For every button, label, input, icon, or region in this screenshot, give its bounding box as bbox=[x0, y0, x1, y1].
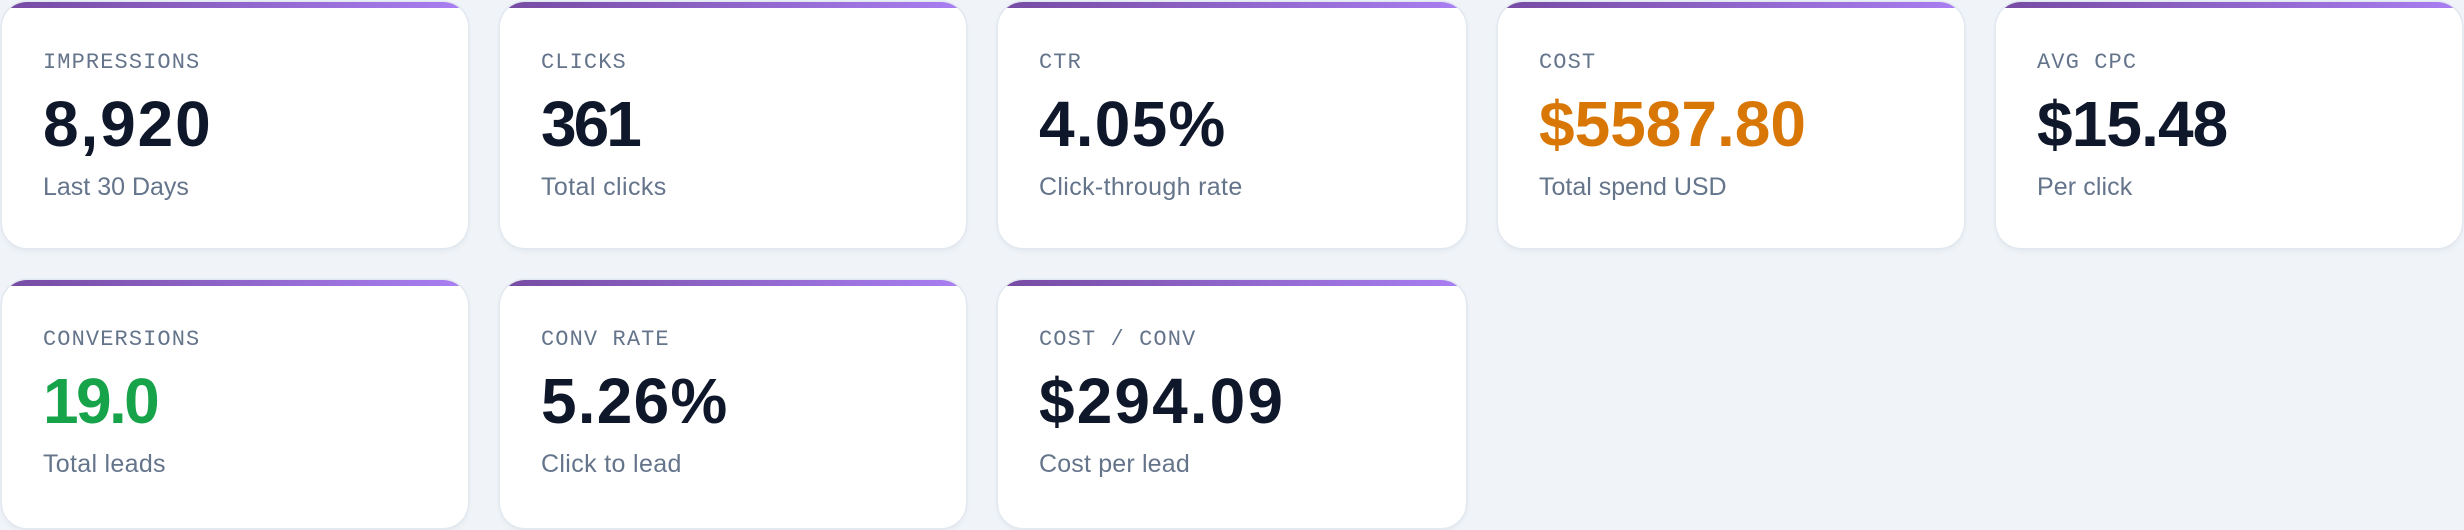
value: 361 bbox=[541, 88, 639, 160]
caption: Cost per lead bbox=[1039, 450, 1190, 478]
value: $294.09 bbox=[1039, 365, 1285, 437]
card: cost per conversion bbox=[998, 280, 1466, 528]
accent bar bbox=[2, 2, 468, 8]
caption: Per click bbox=[2037, 173, 2132, 201]
caption: Click to lead bbox=[541, 450, 682, 478]
accent bar bbox=[500, 280, 966, 286]
value: 5.26% bbox=[541, 365, 728, 437]
label: AVG CPC bbox=[2037, 50, 2137, 75]
card: avg cpc bbox=[1996, 2, 2462, 248]
accent bar bbox=[998, 2, 1466, 8]
caption: Click-through rate bbox=[1039, 173, 1243, 201]
card: conversions bbox=[2, 280, 468, 528]
card: cost bbox=[1498, 2, 1964, 248]
accent bar bbox=[1498, 2, 1964, 8]
accent bar bbox=[998, 280, 1466, 286]
caption: Total leads bbox=[43, 450, 166, 478]
card: conv rate bbox=[500, 280, 966, 528]
card: impressions bbox=[2, 2, 468, 248]
value: 4.05% bbox=[1039, 88, 1226, 160]
card: clicks bbox=[500, 2, 966, 248]
caption: Total spend USD bbox=[1539, 173, 1727, 201]
value: $15.48 bbox=[2037, 88, 2227, 160]
label: IMPRESSIONS bbox=[43, 50, 200, 75]
label: CLICKS bbox=[541, 50, 627, 75]
caption: Total clicks bbox=[541, 173, 667, 201]
label: COST bbox=[1539, 50, 1596, 75]
value: 19.0 bbox=[43, 365, 157, 437]
label: COST / CONV bbox=[1039, 327, 1196, 352]
value: 8,920 bbox=[43, 88, 213, 160]
label: CONVERSIONS bbox=[43, 327, 200, 352]
accent bar bbox=[500, 2, 966, 8]
value: $5587.80 bbox=[1539, 88, 1806, 160]
card: ctr bbox=[998, 2, 1466, 248]
accent bar bbox=[2, 280, 468, 286]
accent bar bbox=[1996, 2, 2462, 8]
label: CONV RATE bbox=[541, 327, 670, 352]
label: CTR bbox=[1039, 50, 1082, 75]
caption: Last 30 Days bbox=[43, 173, 189, 201]
